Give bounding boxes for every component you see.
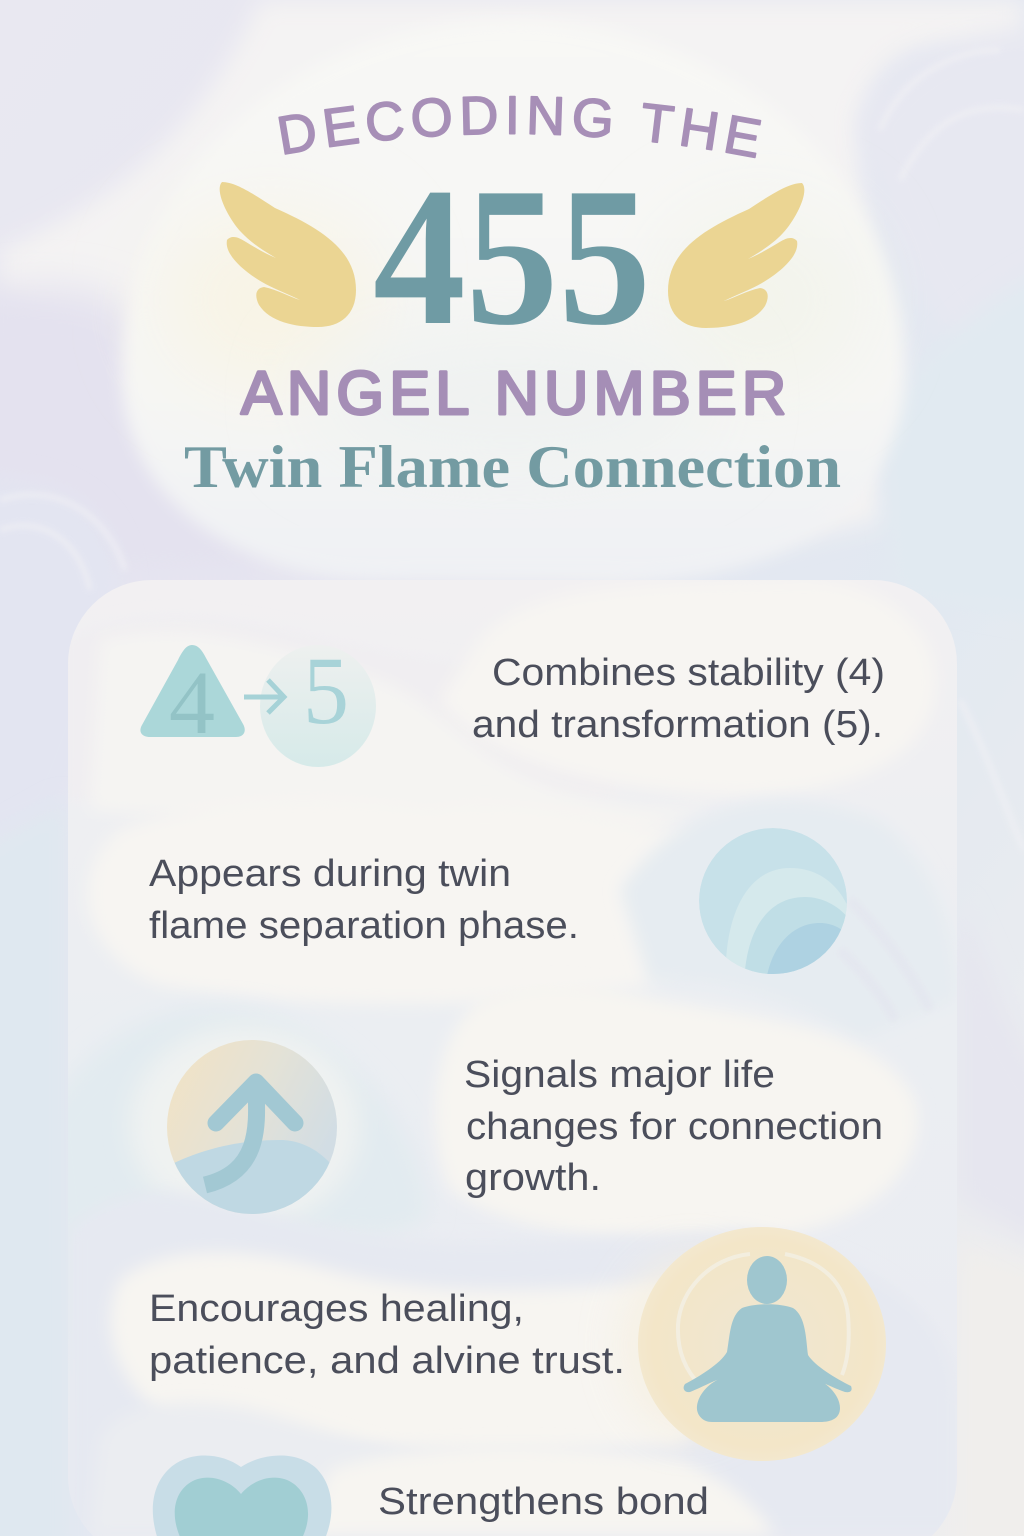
title halo [122, 20, 905, 578]
text: signals: Signals major life [464, 1054, 775, 1096]
icon glow [620, 1255, 760, 1435]
text: signals: growth. [465, 1157, 601, 1199]
text: signals [464, 1054, 883, 1199]
icon: 4 to 5: 5 [303, 637, 349, 744]
text: appears: flame separation phase. [149, 905, 579, 947]
row 3: life changes [167, 1040, 883, 1225]
text: strengthens: Strengthens bond [378, 1481, 709, 1523]
heading: angel number: ANGEL NUMBER [241, 359, 786, 427]
icon: 4 to 5: 4 [169, 654, 215, 753]
row 1: stability and transformation [140, 637, 885, 767]
icon: rising arrow [167, 1040, 337, 1214]
heading: twin flame connection: Twin Flame Connection [184, 434, 841, 500]
heading: decoding the: DECODING THE [278, 96, 762, 158]
row 2: separation phase [149, 828, 847, 974]
text: combines: Combines stability (4) [492, 652, 885, 694]
icon: meditating figure [638, 1227, 886, 1461]
text: appears: Appears during twin [149, 853, 511, 895]
text: combines: and transformation (5). [472, 704, 883, 746]
icon: layered circle [699, 828, 847, 974]
text: encourages [149, 1288, 625, 1382]
panel swirls [68, 736, 914, 1532]
panel: key meanings [40, 580, 957, 1536]
row 5: strengthens bond [153, 1455, 709, 1536]
header: title block [180, 96, 841, 500]
icon: left wing [220, 182, 356, 327]
number: 455: 455 [373, 147, 651, 366]
text: encourages: patience, and alvine trust. [149, 1340, 625, 1382]
icon: 4 to 5 [140, 637, 376, 767]
icon: heart [153, 1455, 331, 1536]
text: combines [472, 652, 885, 746]
text: appears [149, 853, 579, 947]
text: signals: changes for connection [466, 1106, 883, 1148]
text: encourages: Encourages healing, [149, 1288, 524, 1330]
icon: right wing [668, 183, 804, 328]
row 4: healing [149, 1227, 886, 1461]
